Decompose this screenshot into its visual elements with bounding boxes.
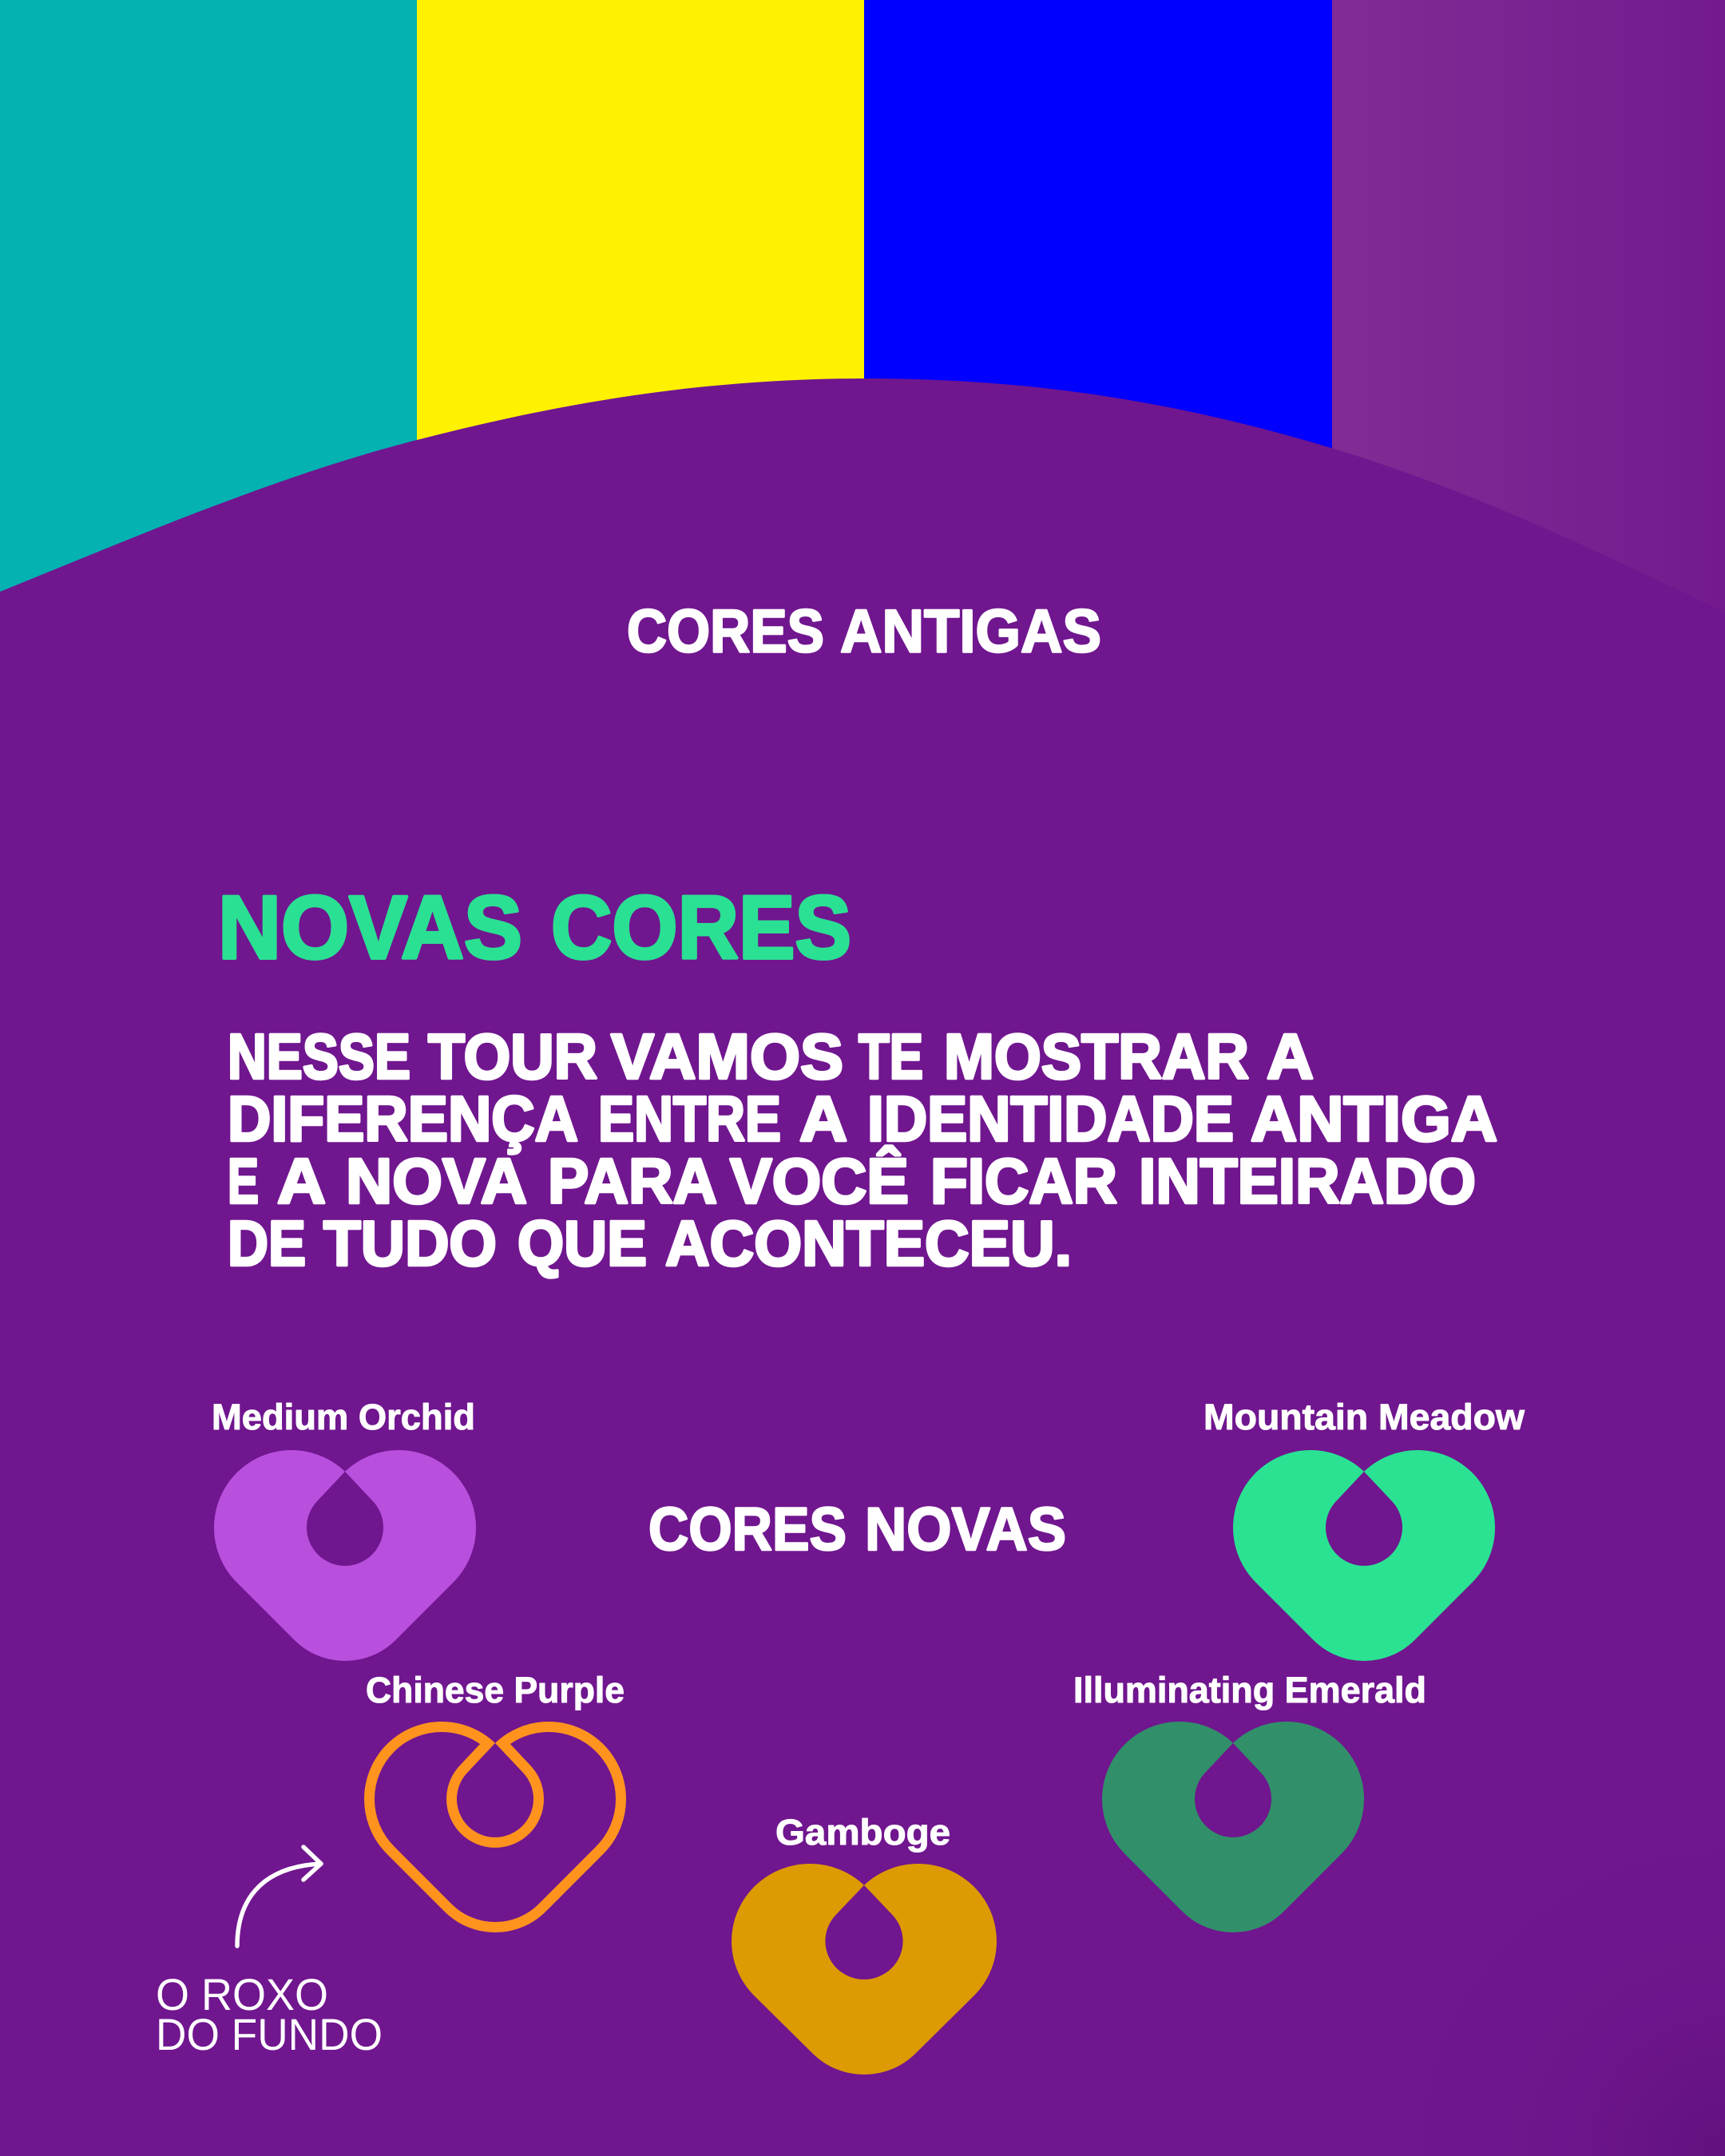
- heading: cores antigas: [627, 597, 1101, 666]
- intro paragraph: DE: [228, 1207, 306, 1279]
- intro paragraph: NOVA: [346, 1145, 527, 1217]
- intro paragraph: INTEIRADO: [1139, 1145, 1476, 1217]
- heading: cores antigas: CORES: [627, 597, 824, 666]
- swatch: illuminating emerald: Illuminating Emerald: [1073, 1670, 1426, 1710]
- intro paragraph: NESSE: [228, 1021, 410, 1092]
- intro paragraph: ACONTECEU.: [665, 1207, 1072, 1279]
- intro paragraph: E: [228, 1145, 259, 1217]
- note: o roxo do fundo: [156, 1969, 383, 2059]
- swatch: gamboge: [732, 1812, 997, 2075]
- heading: cores novas: CORES: [648, 1496, 847, 1563]
- swatch: chinese purple outlined: [364, 1670, 626, 1932]
- swatch: mountain meadow: Mountain Meadow: [1204, 1397, 1525, 1437]
- intro paragraph: IDENTIDADE: [867, 1083, 1234, 1155]
- intro paragraph: ENTRE: [598, 1083, 781, 1155]
- intro paragraph: A: [1267, 1021, 1314, 1092]
- swatch: chinese purple outlined: Chinese Purple: [366, 1670, 625, 1710]
- intro paragraph: DIFERENÇA: [228, 1083, 578, 1155]
- heading: cores novas: NOVAS: [865, 1496, 1066, 1563]
- intro paragraph: VAMOS: [611, 1021, 843, 1092]
- intro paragraph: QUE: [518, 1207, 647, 1279]
- intro paragraph: FICAR: [930, 1145, 1117, 1217]
- swatch: gamboge: Gamboge: [775, 1812, 950, 1853]
- intro paragraph: TUDO: [323, 1207, 497, 1279]
- intro paragraph: VOCÊ: [730, 1145, 909, 1217]
- note: o roxo do fundo: DO FUNDO: [156, 2009, 383, 2059]
- intro paragraph: MOSTRAR: [944, 1021, 1249, 1092]
- arrow: [237, 1847, 321, 1946]
- intro paragraph: TOUR: [428, 1021, 597, 1092]
- intro paragraph: A: [799, 1083, 847, 1155]
- note: o roxo do fundo: O ROXO: [156, 1969, 328, 2019]
- heading: cores novas: [648, 1496, 1066, 1563]
- intro paragraph: [228, 1021, 1497, 1279]
- intro paragraph: ANTIGA: [1251, 1083, 1497, 1155]
- swatch: medium orchid: [212, 1397, 476, 1661]
- old colour stripes: [0, 0, 1725, 639]
- intro paragraph: TE: [859, 1021, 923, 1092]
- swatch: illuminating emerald: [1073, 1670, 1426, 1932]
- title: novas cores: CORES: [551, 878, 851, 977]
- heading: cores antigas: ANTIGAS: [840, 597, 1101, 666]
- intro paragraph: PARA: [548, 1145, 717, 1217]
- swatch: medium orchid: Medium Orchid: [212, 1397, 475, 1437]
- swatch: mountain meadow: [1204, 1397, 1525, 1661]
- title: novas cores: [218, 878, 851, 977]
- title: novas cores: NOVAS: [218, 878, 522, 977]
- intro paragraph: A: [277, 1145, 326, 1217]
